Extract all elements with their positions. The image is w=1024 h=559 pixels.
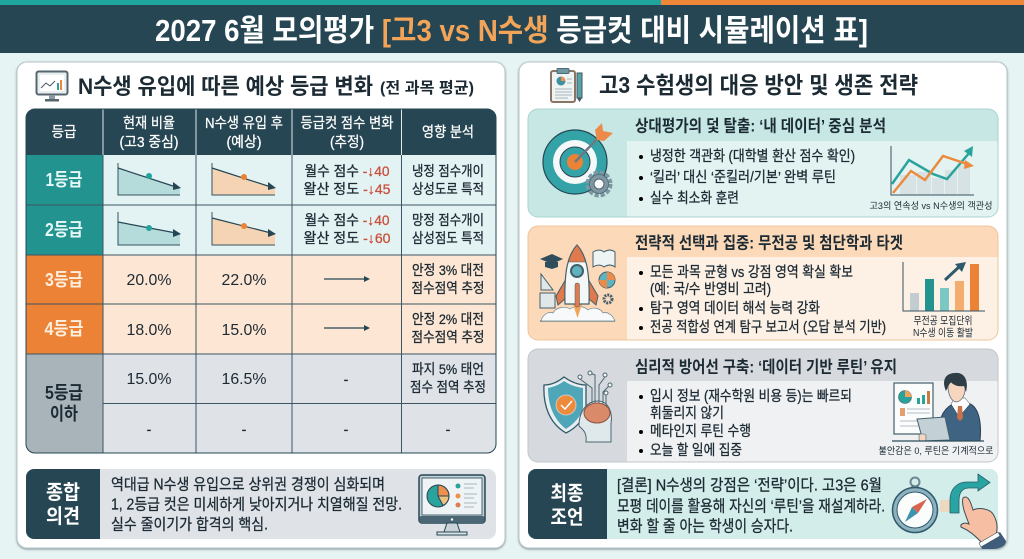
final advice label <box>550 482 584 529</box>
chart: non-major recruitment <box>903 262 985 339</box>
row: grade 4: 18.0% <box>126 322 172 339</box>
icon: rocket <box>540 245 615 321</box>
table header row: (고3 중심) <box>120 134 178 151</box>
row: grade 4: 안정 2% 대전 <box>412 311 484 327</box>
chart: grade 1 after influx <box>212 163 276 195</box>
row: grade 3: 안정 3% 대전 <box>412 262 484 278</box>
bullet list: 냉정한 객관화 (대학별 환산 점수 확인) <box>650 148 855 165</box>
illustration: student reviewing data <box>878 373 994 457</box>
bullet list <box>639 264 886 336</box>
row: grade 3: 3등급 <box>45 270 83 290</box>
final advice text: [결론] N수생의 강점은 ‘전략’이다. 고3은 6월 <box>617 476 882 494</box>
bullet list <box>639 388 852 459</box>
bullet list: 모든 과목 균형 vs 강점 영역 확실 확보 <box>650 264 853 281</box>
row: grade 1: 1등급 <box>46 170 82 190</box>
row: grade 5 and below: - <box>242 421 247 437</box>
row: grade 2: 삼성점도 특적 <box>412 230 484 246</box>
table header row: 등급컷 점수 변화 <box>300 115 394 132</box>
row: grade 1: 월수 점수 -↓40 <box>304 163 390 179</box>
row: grade 5 and below: 15.0% <box>126 371 172 388</box>
card: strategic focus <box>528 226 998 340</box>
icon: compass <box>892 478 938 532</box>
chart: grade 2 after influx <box>212 212 276 245</box>
bullet list: 전공 적합성 연계 탐구 보고서 (오답 분석 기반) <box>650 319 886 336</box>
bullet list: (예: 국/수 반영비 고려) <box>650 281 771 298</box>
icon: clipboard <box>551 68 582 102</box>
chart: grade 2 current ratio <box>118 212 181 245</box>
bullet list: 입시 정보 (재수학원 비용 등)는 빠르되 <box>650 388 852 405</box>
summary label: 종합 <box>46 481 80 504</box>
row: grade 5 and below: 점수 점역 추정 <box>410 379 486 395</box>
row: grade 5 and below <box>45 361 486 437</box>
summary label <box>46 481 80 528</box>
card title: 전략적 선택과 집중: 무전공 및 첨단학과 타겟 <box>635 234 903 252</box>
summary text: 실수 줄이기가 합격의 핵심. <box>111 516 268 534</box>
row: grade 5 and below: 16.5% <box>222 371 266 388</box>
bullet list: 휘둘리지 않기 <box>650 405 724 422</box>
row: grade 4: 점수점역 추정 <box>412 329 484 345</box>
row: grade 5 and below: - <box>344 371 349 387</box>
panel: expected grade change <box>17 62 505 548</box>
row: grade 3: 점수점역 추정 <box>412 280 484 296</box>
bullet list <box>639 148 855 207</box>
panel: response strategy <box>519 62 1007 549</box>
icon: analytics monitor <box>36 72 68 102</box>
panel heading: N수생 유입에 따른 예상 등급 변화 <box>78 74 373 99</box>
card title: 심리적 방어선 구축: ‘데이터 기반 루틴’ 유지 <box>635 358 897 376</box>
row: grade 5 and below: 파지 5% 태언 <box>412 361 484 377</box>
final advice label: 최종 <box>550 482 584 505</box>
row: grade 3: 22.0% <box>222 272 266 289</box>
row: grade 2: 망정 점수개이 <box>412 212 484 228</box>
row: grade 2: 월수 점수 -↓40 <box>304 212 390 228</box>
final advice text: 변화 할 줄 아는 학생이 승자다. <box>617 518 793 536</box>
final advice text <box>617 476 885 536</box>
table: grade simulation <box>26 109 496 453</box>
row: grade 3 <box>45 262 484 296</box>
arrow: grade 4 no change <box>324 325 370 331</box>
card: data-centered analysis <box>528 109 998 217</box>
card: psychological defense <box>528 349 998 462</box>
row: grade 5 and below: 5등급 <box>45 383 83 403</box>
row: grade 2: 왈산 정도 -↓60 <box>304 230 391 246</box>
final advice box <box>528 469 1006 549</box>
chart: grade 1 current ratio <box>118 163 181 195</box>
row: grade 5 and below: - <box>446 421 451 437</box>
table header row <box>52 115 474 151</box>
icon: shield and brain <box>544 371 612 442</box>
row: grade 1: 왈산 정도 -↓45 <box>304 181 391 197</box>
panel heading: 고3 수험생의 대응 방안 및 생존 전략 <box>599 72 918 98</box>
summary text: 1, 2등급 컷은 미세하게 낮아지거나 치열해질 전망. <box>111 496 402 514</box>
row: grade 4: 4등급 <box>44 319 84 339</box>
row: grade 2 <box>45 212 484 246</box>
summary text: 역대급 N수생 유입으로 상위권 경쟁이 심화되며 <box>111 476 385 494</box>
row: grade 5 and below: - <box>147 421 152 437</box>
panel heading: (전 과목 평균) <box>380 79 474 97</box>
header banner <box>0 0 1024 53</box>
bullet list: 실수 최소화 훈련 <box>650 190 739 207</box>
icon: pie chart monitor <box>419 475 485 535</box>
table header row: (추정) <box>330 134 364 151</box>
bullet list: 탐구 영역 데이터 해석 능력 강화 <box>650 300 820 317</box>
final advice label: 조언 <box>550 506 584 529</box>
table header row: (예상) <box>226 134 262 151</box>
row: grade 3: 20.0% <box>126 272 172 289</box>
bullet list: ‘킬러’ 대신 ‘준킬러/기본’ 완벽 루틴 <box>650 169 836 186</box>
row: grade 4: 15.0% <box>222 322 266 339</box>
row: grade 1: 냉정 점수개이 <box>412 163 484 179</box>
row: grade 5 and below: 이하 <box>50 404 78 424</box>
illustration: student reviewing data: 불안감은 0, 루틴은 기계적으로 <box>878 445 994 457</box>
summary label: 의견 <box>46 505 80 528</box>
icon: target with gear <box>543 123 613 195</box>
arrow: grade 3 no change <box>324 276 370 282</box>
summary text <box>111 476 402 534</box>
row: grade 1 <box>46 163 484 197</box>
icon: turn arrow and pointing hand <box>940 474 1006 549</box>
table header row: 등급 <box>52 125 76 141</box>
title: 2027 6월 모의평가 [고3 vs N수생 등급컷 대비 시뮬레이션 표] <box>155 14 868 48</box>
card title: 상대평가의 덫 탈출: ‘내 데이터’ 중심 분석 <box>635 116 886 136</box>
chart: continuity vs objectivity <box>870 146 992 212</box>
row: grade 5 and below: - <box>344 421 349 437</box>
chart: non-major recruitment: N수생 이동 활발 <box>913 326 973 339</box>
table header row: N수생 유입 후 <box>205 115 283 132</box>
row: grade 2: 2등급 <box>45 220 83 240</box>
final advice text: 모평 데이를 활용해 자신의 ‘루틴’을 재설계하라. <box>617 498 885 516</box>
chart: non-major recruitment: 무전공 모집단위 <box>914 314 972 327</box>
summary box <box>26 469 496 539</box>
table header row: 영향 분석 <box>422 124 474 141</box>
table header row: 현재 비율 <box>123 115 175 132</box>
chart: continuity vs objectivity: 고3의 연속성 vs N수생의 객관성 <box>870 201 992 212</box>
row: grade 1: 상성도로 특적 <box>412 181 484 197</box>
bullet list: 오늘 할 일에 집중 <box>650 442 742 459</box>
row: grade 4 <box>44 311 484 345</box>
bullet list: 메타인지 루틴 수행 <box>650 423 751 440</box>
